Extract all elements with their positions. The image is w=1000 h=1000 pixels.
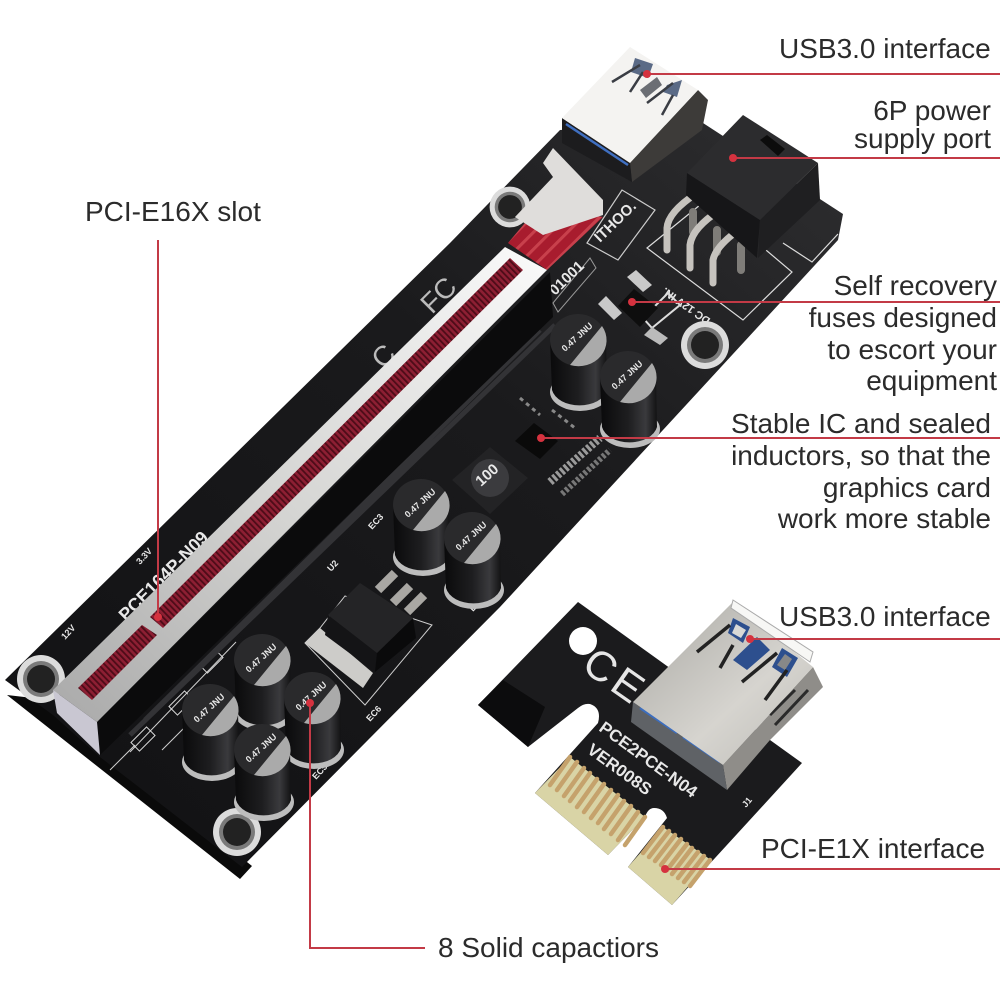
label: stable IC and sealed inductors: inductors, so that the [731,440,991,471]
label: 8 Solid capacitors: 8 Solid capactiors [438,932,659,963]
6P power connector [667,115,820,283]
capacitors: 0.47 JNU [192,692,227,724]
label: PCI-E16X slot: PCI-E16X slot [85,196,261,227]
label: stable IC and sealed inductors: work more stable [777,503,991,534]
silkscreen markings: 12V [59,623,77,641]
silkscreen markings: EC6 [364,704,383,723]
label: stable IC and sealed inductors: Stable IC and sealed [731,408,991,439]
USB3.0 connector on adapter [631,600,823,790]
label: 6P power supply port: supply port [854,123,991,154]
fuse and components [598,270,680,345]
silkscreen markings: EC5 [310,762,329,781]
silkscreen markings: U2 [325,558,340,573]
adapter silkscreen: PCE2PCE-N04 [596,718,701,802]
label: stable IC and sealed inductors: graphics card [823,472,991,503]
stable IC [515,423,558,459]
capacitors: 0.47 JNU [294,680,329,712]
label: USB3.0 interface (adapter): USB3.0 interface [779,601,991,632]
label: USB3.0 interface (adapter) [746,601,1000,643]
silkscreen markings: 3.3V [134,546,154,566]
label: self recovery fuses: to escort your [827,334,997,365]
capacitors: 0.47 JNU [403,487,438,519]
label: PCI-E1X interface [661,833,1000,873]
voltage regulator U2 [305,573,424,688]
label: self recovery fuses [628,270,1000,396]
label: stable IC and sealed inductors [537,408,1000,534]
gold fingers [535,757,711,905]
capacitors: 0.47 JNU [454,520,489,552]
capacitors: 0.47 JNU [560,321,595,353]
silkscreen markings: EC3 [366,512,385,531]
label: PCI-E1X interface: PCI-E1X interface [761,833,985,864]
adapter silkscreen [584,718,754,809]
label: USB3.0 interface (top): USB3.0 interface [779,33,991,64]
sealed inductor: 100 [472,461,502,490]
capacitors: 0.47 JNU [244,732,279,764]
label: self recovery fuses: Self recovery [834,270,997,301]
silkscreen markings: PCE164P-N09 [115,527,212,625]
panel: small PCI-E1X adapter [478,600,823,905]
sealed inductor [452,447,528,514]
adapter silkscreen: VER008S [584,740,655,799]
adapter silkscreen: J1 [740,795,754,809]
label: USB3.0 interface (top) [643,33,1000,78]
icons: mounting holes [17,187,729,856]
panel: large riser board [5,123,843,879]
USB3.0 connector on large board [562,47,708,182]
silkscreen markings: C [365,338,402,374]
label: 6P power supply port: 6P power [873,95,991,126]
capacitors: 0.47 JNU [610,359,645,391]
capacitors [182,314,660,821]
silkscreen markings: FC [414,271,463,319]
PCI-E16X slot [53,148,603,755]
silkscreen markings: 01001 [546,258,588,299]
capacitors: 0.47 JNU [244,642,279,674]
label: self recovery fuses: equipment [866,365,997,396]
silkscreen markings: ITHOO. [591,198,640,246]
label: 8 Solid capacitors [306,699,659,963]
CE mark: CE [575,638,656,714]
silkscreen markings [59,190,838,781]
silkscreen markings: DC 12V IN. [660,285,713,326]
label: 6P power supply port [729,95,1000,162]
label: PCI-E16X slot [85,196,261,621]
label: self recovery fuses: fuses designed [809,302,997,333]
silkscreen markings: EC7 [467,594,486,613]
